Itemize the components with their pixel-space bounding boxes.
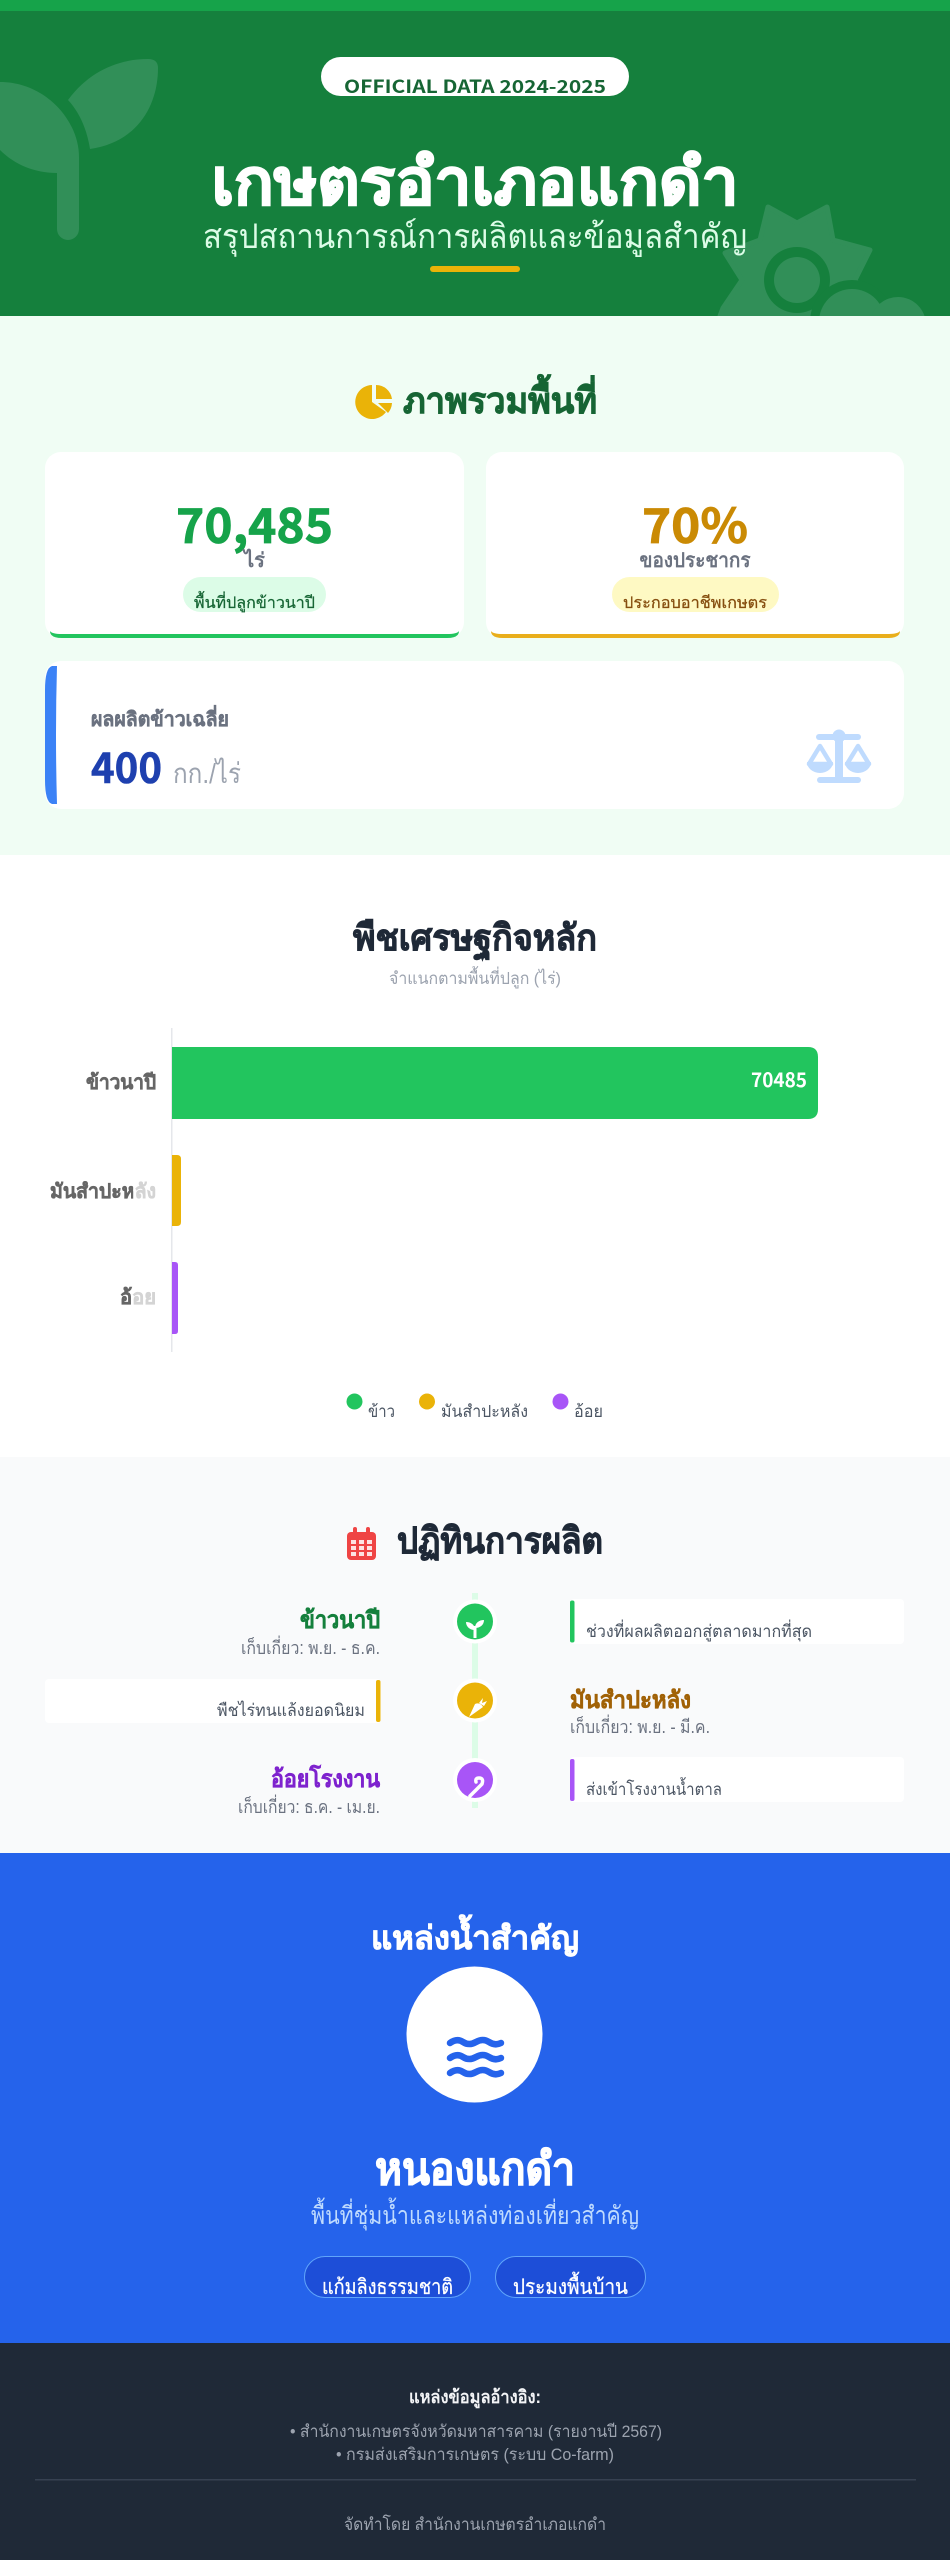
badge: official data: OFFICIAL DATA 2024-2025: [344, 73, 606, 99]
card: rice area: [45, 452, 464, 638]
footer sources: • กรมส่งเสริมการเกษตร (ระบบ Co-farm): [336, 2445, 614, 2464]
card: rice area: 70,485: [176, 487, 333, 557]
icon: calendar: [347, 1527, 376, 1560]
chart legend: มันสำปะหลัง: [441, 1402, 528, 1421]
panel: footer: [0, 2343, 950, 2560]
card: average rice yield: 400: [91, 735, 162, 796]
chip: local fishery: [496, 2256, 646, 2299]
note: sugarcane: [570, 1757, 904, 1802]
bar chart: [50, 1028, 818, 1352]
footer heading: แหล่งข้อมูลอ้างอิง:: [409, 2387, 541, 2409]
card: farmers percent: 70%: [642, 487, 748, 557]
note: sugarcane: ส่งเข้าโรงงานน้ำตาล: [586, 1777, 722, 1799]
card: farmers percent: ของประชากร: [640, 550, 751, 572]
icon: water circle: [406, 1966, 542, 2102]
chip: local fishery: ประมงพื้นบ้าน: [513, 2272, 628, 2299]
panel: production calendar: [0, 1457, 950, 1853]
bar chart: 70485: [751, 1064, 807, 1093]
panel: main economic crops: [0, 855, 950, 1457]
item: cassava: [570, 1687, 710, 1737]
card: rice area: ไร่: [242, 548, 265, 572]
subtitle: สรุปสถานการณ์การผลิตและข้อมูลสำคัญ: [203, 218, 747, 257]
accent bar: [430, 266, 520, 272]
item: rice: [241, 1607, 380, 1658]
item: sugarcane: อ้อยโรงงาน: [271, 1764, 381, 1793]
title: เกษตรอำเภอแกดำ: [212, 146, 738, 218]
bar chart: มันสำปะหลัง: [50, 1181, 156, 1203]
item: rice: เก็บเกี่ยว: พ.ย. - ธ.ค.: [241, 1635, 380, 1658]
heading: water: แหล่งน้ำสำคัญ: [371, 1914, 579, 1957]
note: cassava: พืชไร่ทนแล้งยอดนิยม: [217, 1700, 365, 1720]
note: rice: [570, 1599, 904, 1644]
item: rice: ข้าวนาปี: [300, 1607, 380, 1634]
card: average rice yield: กก./ไร่: [173, 758, 241, 789]
icon: gear watermark: [700, 207, 950, 364]
title: Nong Kae Dam: หนองแกดำ: [375, 2145, 575, 2194]
bar chart: ข้าวนาปี: [86, 1071, 156, 1094]
card: average rice yield: ผลผลิตข้าวเฉลี่ย: [91, 704, 229, 731]
card: rice area: พื้นที่ปลูกข้าวนาปี: [194, 591, 315, 613]
chip: natural drought solution: [304, 2256, 470, 2299]
subtitle: water: พื้นที่ชุ่มน้ำและแหล่งท่องเที่ยวสำคัญ: [311, 2197, 639, 2231]
item: sugarcane: เก็บเกี่ยว: ธ.ค. - เม.ย.: [238, 1794, 380, 1817]
icon: pie chart: [355, 385, 392, 419]
card: farmers percent: ประกอบอาชีพเกษตร: [623, 594, 767, 612]
chip: natural drought solution: แก้มลิงธรรมชาติ: [322, 2276, 453, 2299]
heading: crops: พืชเศรษฐกิจหลัก: [353, 917, 597, 961]
footer sources: • สำนักงานเกษตรจังหวัดมหาสารคาม (รายงานปี 2567): [290, 2422, 662, 2441]
icon: scales: [807, 730, 871, 783]
card: average rice yield: [45, 661, 904, 809]
timeline: [453, 1593, 497, 1808]
badge: official data: [321, 57, 629, 99]
note: cassava: [45, 1679, 381, 1723]
footer sources: [290, 2422, 662, 2464]
item: sugarcane: [238, 1764, 381, 1817]
chart legend: [346, 1394, 603, 1421]
panel: water source: [0, 1853, 950, 2343]
chart legend: ข้าว: [368, 1402, 395, 1421]
note: rice: ช่วงที่ผลผลิตออกสู่ตลาดมากที่สุด: [586, 1619, 812, 1642]
item: cassava: มันสำปะหลัง: [570, 1687, 691, 1714]
panel: header: [0, 0, 950, 364]
chart legend: อ้อย: [574, 1402, 603, 1421]
footer credit: จัดทำโดย สำนักงานเกษตรอำเภอแกดำ: [344, 2514, 606, 2534]
icon: seedling watermark: [0, 59, 158, 240]
heading: overview: ภาพรวมพื้นที่: [403, 374, 597, 421]
card: farmers percent: [486, 452, 904, 638]
item: cassava: เก็บเกี่ยว: พ.ย. - มี.ค.: [570, 1714, 710, 1737]
subheading: crops: จำแนกตามพื้นที่ปลูก (ไร่): [389, 966, 561, 989]
bar chart: อ้อย: [120, 1286, 156, 1309]
heading: calendar: ปฏิทินการผลิต: [397, 1520, 603, 1561]
panel: area overview: [0, 316, 950, 855]
